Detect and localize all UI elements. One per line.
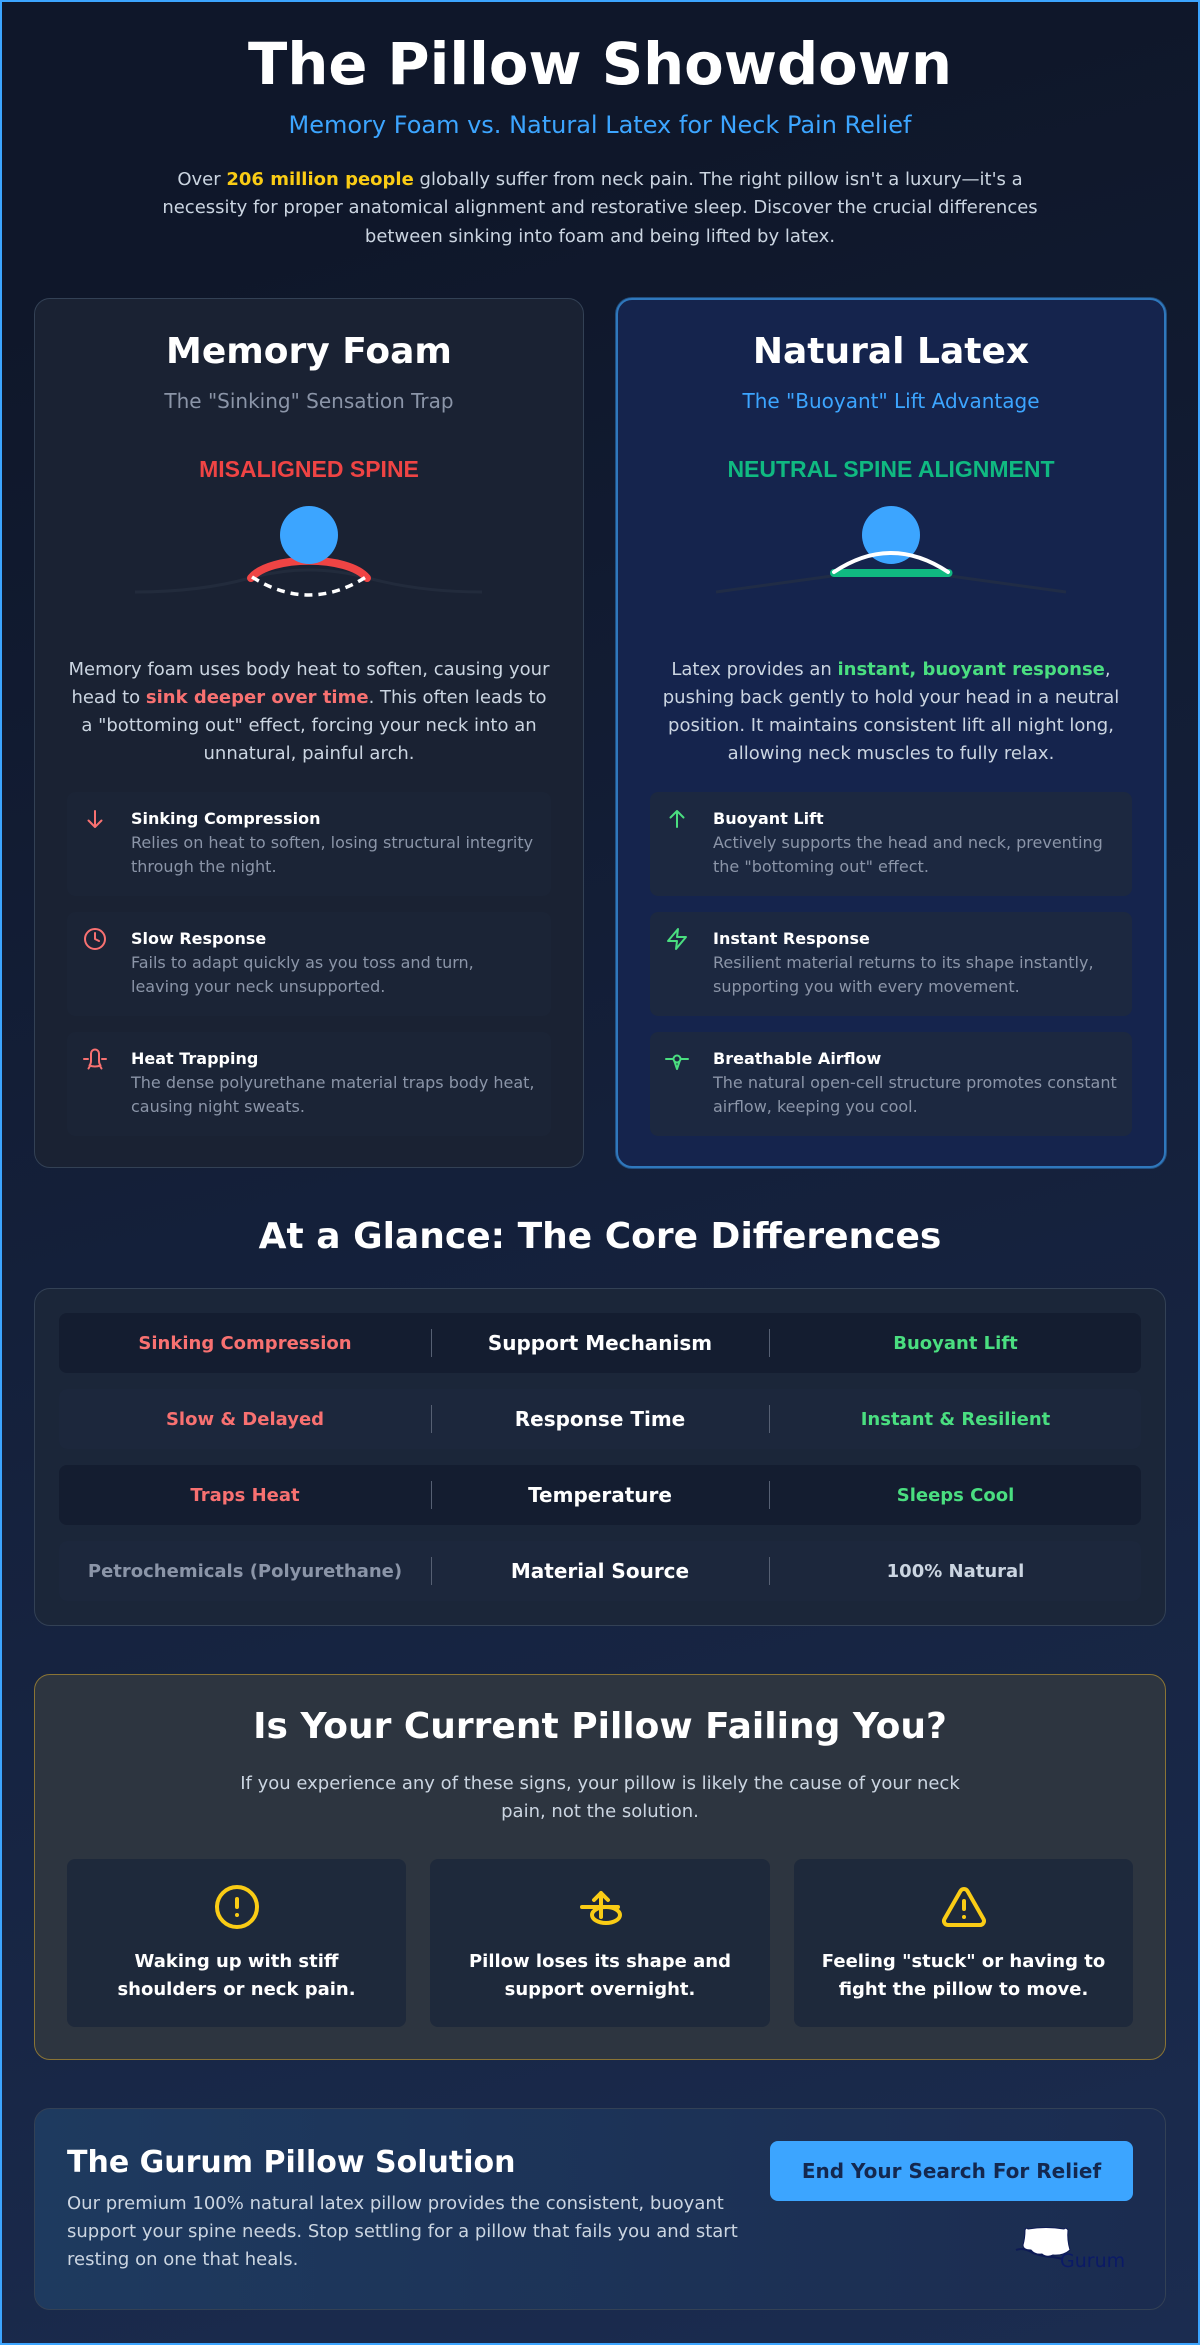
sign card: feeling stuck: fight the pillow to move. <box>839 1979 1088 2000</box>
row: response time <box>59 1389 1141 1449</box>
body text: natural latex: allowing neck muscles to fully relax. <box>728 743 1054 764</box>
row: response time: Slow & Delayed <box>166 1409 324 1430</box>
panel: comparison table <box>34 1288 1166 1626</box>
row: response time: Instant & Resilient <box>861 1409 1050 1430</box>
sign card: feeling stuck <box>794 1859 1133 2027</box>
feature: instant response: supporting you with every movement. <box>713 977 1020 996</box>
feature: slow response: Fails to adapt quickly as you toss and turn, <box>131 953 474 972</box>
button <box>770 2141 1133 2201</box>
feature: heat trapping <box>67 1032 551 1136</box>
intro text: Over 206 million people globally suffer from neck pain. The right pillow isn't a luxury—it's a <box>177 169 1023 190</box>
feature: buoyant lift: Actively supports the head and neck, preventing <box>713 833 1103 852</box>
subtitle: Memory Foam vs. Natural Latex for Neck Pain Relief <box>289 111 911 139</box>
feature: heat trapping: causing night sweats. <box>131 1097 305 1116</box>
feature: breathable airflow: airflow, keeping you cool. <box>713 1097 918 1116</box>
body text: memory foam: unnatural, painful arch. <box>204 743 414 764</box>
row: material source: Material Source <box>511 1559 689 1583</box>
panel: natural latex <box>616 298 1166 1168</box>
row: temperature <box>59 1465 1141 1525</box>
label: misaligned spine: MISALIGNED SPINE <box>199 456 419 482</box>
icon: heat <box>83 1048 107 1070</box>
intro text: between sinking into foam and being lifted by latex. <box>365 226 835 247</box>
feature: instant response: Instant Response <box>713 929 870 948</box>
subheading: sinking: The "Sinking" Sensation Trap <box>164 389 454 413</box>
row: temperature: Traps Heat <box>190 1485 300 1506</box>
heading: at a glance: At a Glance: The Core Differences <box>259 1216 941 1257</box>
warning intro text <box>240 1773 960 1822</box>
icon: lost shape <box>580 1890 622 1925</box>
body text: memory foam: a "bottoming out" effect, forcing your neck into an <box>81 715 537 736</box>
feature: slow response: leaving your neck unsupported. <box>131 977 385 996</box>
row: support mechanism: Sinking Compression <box>138 1333 352 1354</box>
icon: bolt <box>667 928 687 950</box>
intro text <box>162 169 1038 247</box>
feature: slow response: Slow Response <box>131 929 266 948</box>
body text: natural latex: pushing back gently to hold your head in a neutral <box>663 687 1119 708</box>
heading: gurum solution: The Gurum Pillow Solution <box>67 2145 516 2180</box>
body text: natural latex <box>663 659 1119 764</box>
diagram: misaligned spine <box>135 456 482 597</box>
sign card: feeling stuck: Feeling "stuck" or having to <box>822 1951 1105 1972</box>
feature: breathable airflow: Breathable Airflow <box>713 1049 881 1068</box>
icon: airflow <box>665 1054 689 1070</box>
icon: warning triangle <box>942 1887 986 1927</box>
heading: memory foam: Memory Foam <box>166 331 452 372</box>
icon: arrow up <box>670 810 684 828</box>
button: End Your Search For Relief <box>802 2159 1101 2183</box>
row: temperature: Temperature <box>528 1483 672 1507</box>
row: material source: 100% Natural <box>887 1561 1024 1582</box>
feature: sinking compression: through the night. <box>131 857 277 876</box>
row: response time: Response Time <box>515 1407 685 1431</box>
feature: slow response <box>67 912 551 1016</box>
sign card: loses shape <box>430 1859 770 2027</box>
title: The Pillow Showdown <box>248 31 952 98</box>
icon: arrow down <box>88 810 102 828</box>
row: temperature: Sleeps Cool <box>897 1485 1014 1506</box>
feature: buoyant lift: Buoyant Lift <box>713 809 824 828</box>
feature: heat trapping: The dense polyurethane material traps body heat, <box>131 1073 535 1092</box>
row: material source: Petrochemicals (Polyurethane) <box>88 1561 402 1582</box>
sign card: stiff shoulders: Waking up with stiff <box>134 1951 338 1972</box>
feature: sinking compression: Relies on heat to soften, losing structural integrity <box>131 833 533 852</box>
body text: memory foam: head to sink deeper over time. This often leads to <box>71 687 547 708</box>
panel: memory foam <box>34 298 584 1168</box>
cta text: support your spine needs. Stop settling for a pillow that fails you and start <box>67 2221 738 2242</box>
warning intro text: If you experience any of these signs, your pillow is likely the cause of your neck <box>240 1773 960 1794</box>
cta text <box>67 2193 738 2270</box>
cta text: Our premium 100% natural latex pillow provides the consistent, buoyant <box>67 2193 724 2214</box>
feature: buoyant lift: the "bottoming out" effect. <box>713 857 929 876</box>
label: neutral spine: NEUTRAL SPINE ALIGNMENT <box>727 456 1055 482</box>
heading: failing you: Is Your Current Pillow Failing You? <box>253 1706 947 1747</box>
row: support mechanism <box>59 1313 1141 1373</box>
cta text: resting on one that heals. <box>67 2249 298 2270</box>
feature: sinking compression <box>67 792 551 896</box>
panel: call to action <box>34 2108 1166 2310</box>
warning intro text: pain, not the solution. <box>501 1801 699 1822</box>
panel: warning signs <box>34 1674 1166 2060</box>
icon: alert circle <box>215 1885 259 1929</box>
feature: instant response: Resilient material returns to its shape instantly, <box>713 953 1094 972</box>
sign card: loses shape: support overnight. <box>505 1979 695 2000</box>
intro text: necessity for proper anatomical alignment and restorative sleep. Discover the crucial differences <box>162 197 1038 218</box>
feature: heat trapping: Heat Trapping <box>131 1049 258 1068</box>
feature: breathable airflow <box>650 1032 1132 1136</box>
logo: gurum <box>1016 2227 1125 2272</box>
row: support mechanism: Support Mechanism <box>488 1331 712 1355</box>
subheading: buoyant: The "Buoyant" Lift Advantage <box>742 389 1040 413</box>
sign card: stiff shoulders: shoulders or neck pain. <box>117 1979 356 2000</box>
feature: buoyant lift <box>650 792 1132 896</box>
body text: natural latex: position. It maintains consistent lift all night long, <box>668 715 1114 736</box>
feature: sinking compression: Sinking Compression <box>131 809 320 828</box>
sign card: stiff shoulders <box>67 1859 406 2027</box>
diagram: neutral spine <box>716 456 1066 594</box>
sign card: loses shape: Pillow loses its shape and <box>469 1951 731 1972</box>
row: support mechanism: Buoyant Lift <box>893 1333 1018 1354</box>
feature: breathable airflow: The natural open-cell structure promotes constant <box>713 1073 1117 1092</box>
feature: instant response <box>650 912 1132 1016</box>
body text: memory foam <box>68 659 550 764</box>
row: material source <box>59 1541 1141 1601</box>
body text: memory foam: Memory foam uses body heat to soften, causing your <box>68 659 549 680</box>
icon: clock <box>84 928 106 950</box>
heading: natural latex: Natural Latex <box>753 331 1029 372</box>
body text: natural latex: Latex provides an instant, buoyant response, <box>671 659 1111 680</box>
logo wordmark: Gurum <box>1060 2250 1125 2272</box>
icon: pillow <box>1016 2227 1070 2260</box>
